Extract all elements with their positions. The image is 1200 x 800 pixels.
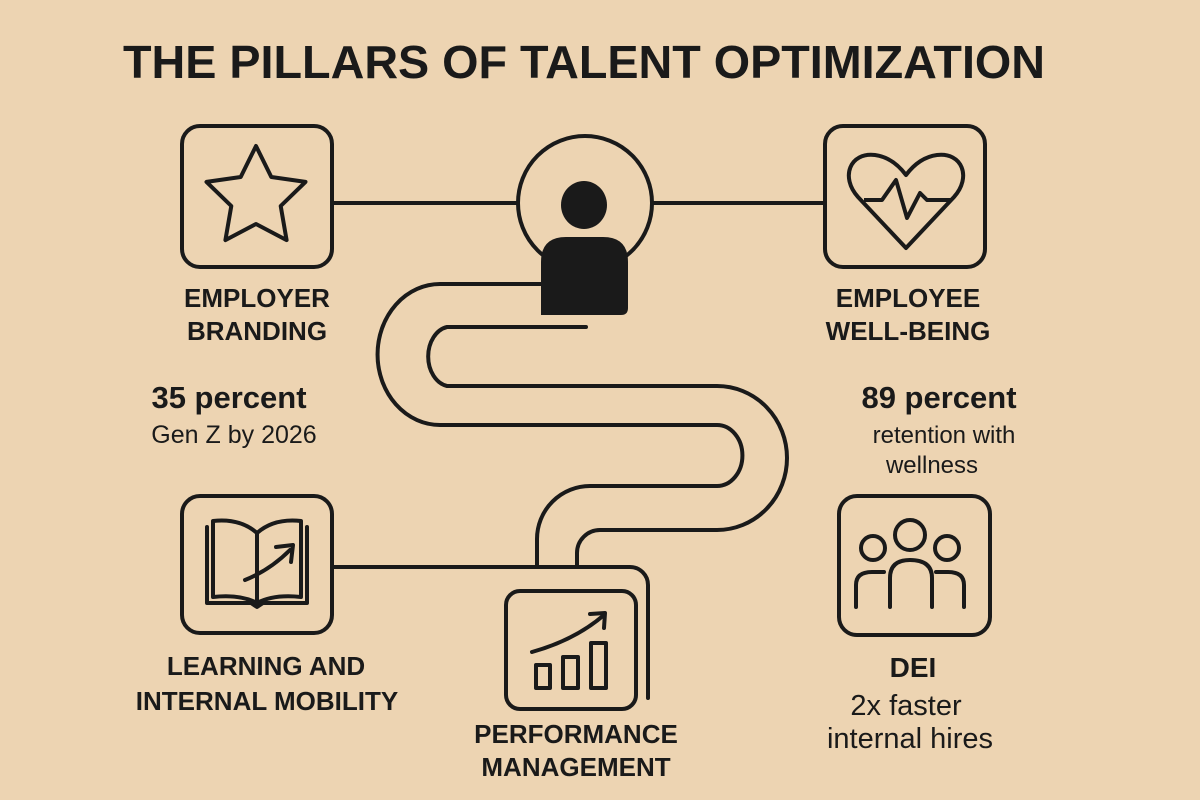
stat: 89 percent: retention with — [873, 422, 1015, 449]
panel: DEI: internal hires — [827, 723, 993, 755]
icon: book with arrow — [182, 496, 332, 633]
stat: 35 percent: 35 percent — [151, 380, 307, 415]
panel: employee well-being: EMPLOYEE — [836, 283, 980, 313]
panel: learning and internal mobility: LEARNING AND — [167, 651, 365, 681]
panel: DEI: DEI — [890, 652, 936, 683]
icon: people group — [839, 496, 990, 635]
panel: learning and internal mobility: INTERNAL MOBILITY — [136, 686, 398, 716]
icon: heart with pulse — [825, 126, 985, 267]
stat: 35 percent — [151, 380, 317, 449]
panel: learning and internal mobility — [136, 496, 398, 716]
stat: 35 percent: Gen Z by 2026 — [151, 421, 317, 449]
icon: star — [182, 126, 332, 267]
panel: employer branding: BRANDING — [187, 316, 327, 346]
panel: employee well-being: WELL-BEING — [826, 316, 990, 346]
panel: performance management — [474, 591, 678, 782]
connector lines — [332, 203, 825, 698]
panel: performance management: PERFORMANCE — [474, 719, 678, 749]
panel: DEI — [827, 496, 993, 755]
panel: performance management: MANAGEMENT — [481, 752, 671, 782]
stat: 89 percent — [861, 380, 1017, 479]
central person icon — [518, 136, 652, 315]
panel: DEI: 2x faster — [850, 690, 962, 722]
icon: bar chart — [506, 591, 636, 709]
title: THE PILLARS OF TALENT OPTIMIZATION — [123, 36, 1045, 88]
panel: employee well-being — [825, 126, 990, 346]
stat: 89 percent: 89 percent — [861, 380, 1017, 415]
panel: employer branding — [182, 126, 332, 346]
stat: 89 percent: wellness — [885, 452, 978, 479]
panel: employer branding: EMPLOYER — [184, 283, 330, 313]
